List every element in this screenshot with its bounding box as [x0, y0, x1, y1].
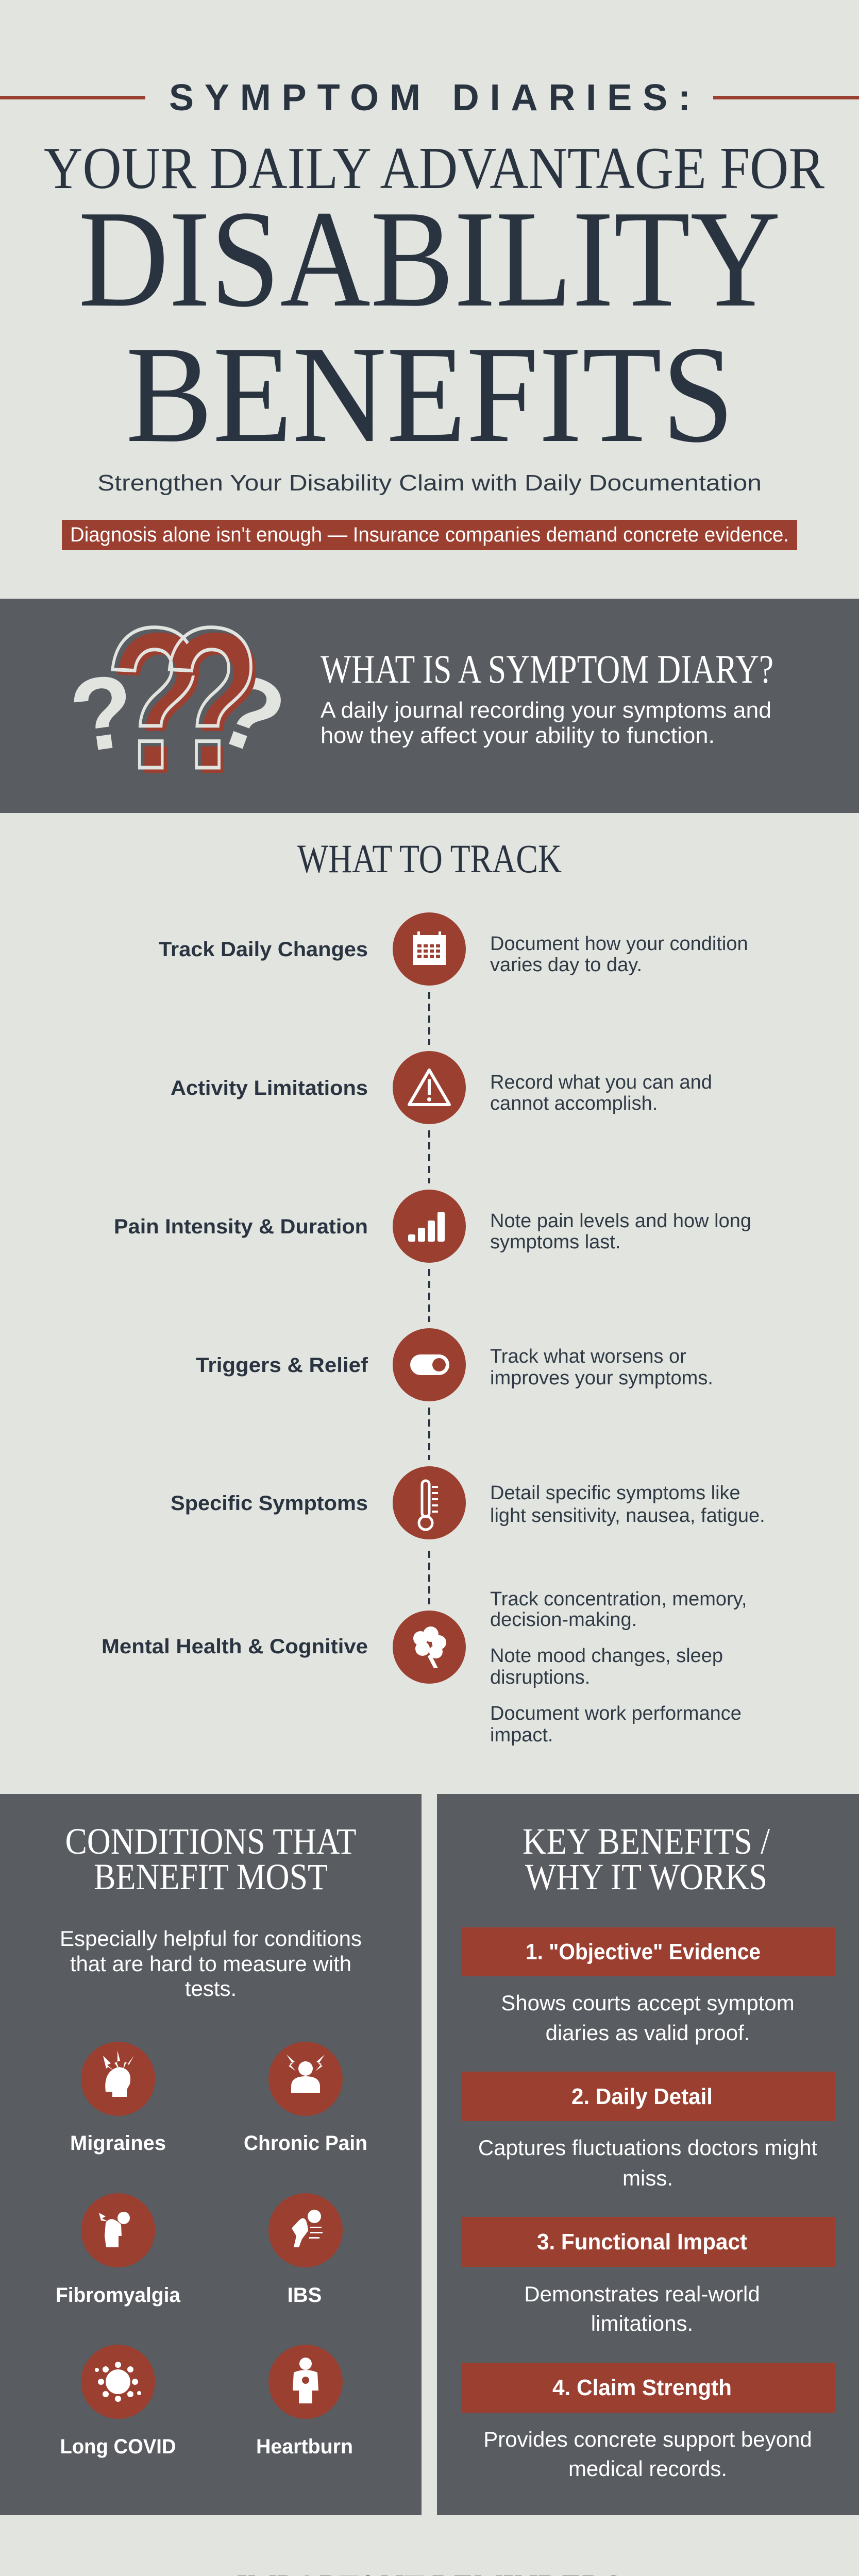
benefit 3: Demonstrates real-world: [524, 2282, 760, 2306]
panel: what is a symptom diary: [0, 586, 859, 816]
item: mental health: Note mood changes, sleep: [490, 1645, 723, 1667]
benefit 2: [462, 2072, 835, 2190]
item: activity limitations: cannot accomplish.: [490, 1093, 658, 1114]
item: track daily changes: varies day to day.: [490, 954, 642, 976]
item: triggers & relief: [196, 1328, 713, 1401]
item: mental health: [102, 1588, 747, 1746]
text: intro: that are hard to measure with: [70, 1952, 351, 1976]
item: specific symptoms: Detail specific symptoms like: [490, 1482, 740, 1504]
panel: conditions that benefit most: [0, 1794, 422, 2515]
text: definition: how they affect your ability to function.: [321, 723, 715, 748]
benefit 4: medical records.: [568, 2456, 727, 2481]
labels: conditions: Fibromyalgia: [56, 2284, 181, 2307]
heading: conditions: CONDITIONS THAT: [65, 1821, 357, 1862]
item: mental health: Mental Health & Cognitive: [102, 1635, 368, 1658]
item: mental health: Track concentration, memory,: [490, 1588, 747, 1610]
heading: key benefits: KEY BENEFITS /: [523, 1821, 770, 1862]
item: activity limitations: Activity Limitations: [171, 1077, 368, 1099]
benefit 1: 1. "Objective" Evidence: [526, 1939, 761, 1964]
item: track daily changes: Document how your condition: [490, 933, 748, 955]
labels: conditions: Migraines: [70, 2132, 166, 2155]
icon: question marks: ?: [200, 649, 299, 778]
text: intro: Especially helpful for conditions: [60, 1926, 362, 1951]
item: triggers & relief: Triggers & Relief: [196, 1354, 368, 1377]
labels: conditions: Heartburn: [256, 2435, 353, 2458]
callout: diagnosis alone: Diagnosis alone isn't enough — Insurance companies demand concrete evidence.: [70, 523, 789, 546]
heading: what to track: WHAT TO TRACK: [297, 836, 562, 881]
benefit 4: 4. Claim Strength: [552, 2375, 732, 2400]
item: specific symptoms: light sensitivity, nausea, fatigue.: [490, 1505, 765, 1527]
labels: conditions: Chronic Pain: [244, 2132, 367, 2155]
icon: question marks: ?: [162, 586, 260, 810]
item: mental health: Document work performance: [490, 1703, 742, 1724]
benefit 2: 2. Daily Detail: [571, 2084, 713, 2109]
icon: question marks: ?: [110, 591, 208, 816]
panel: key benefits: [437, 1794, 859, 2515]
heading: conditions: [65, 1821, 357, 1897]
item: pain intensity: symptoms last.: [490, 1231, 620, 1253]
labels: conditions: Long COVID: [60, 2435, 176, 2458]
item: specific symptoms: [171, 1466, 765, 1539]
heading: key benefits: WHY IT WORKS: [525, 1856, 767, 1897]
timeline: what to track: [102, 912, 765, 1746]
benefit 2: miss.: [622, 2166, 673, 2190]
labels: conditions: [56, 2132, 367, 2458]
icon: question marks: [63, 586, 299, 816]
item: pain intensity: Pain Intensity & Duration: [114, 1215, 368, 1238]
text: intro: [60, 1926, 362, 2001]
icon grid: conditions: [81, 2042, 343, 2419]
text: definition: [321, 698, 771, 748]
benefit 1: diaries as valid proof.: [546, 2021, 750, 2045]
text: definition: A daily journal recording your symptoms and: [321, 698, 771, 723]
heading: key benefits: [523, 1821, 770, 1897]
benefit 2: Captures fluctuations doctors might: [478, 2136, 817, 2160]
benefit 4: [462, 2363, 835, 2481]
title line 2: DISABILITY: [78, 182, 781, 336]
item: track daily changes: [159, 912, 748, 986]
item: pain intensity: [114, 1190, 751, 1263]
icon: question marks: ?: [63, 652, 142, 775]
labels: conditions: IBS: [288, 2284, 322, 2307]
subtitle: Strengthen Your Disability Claim with Daily Documentation: [97, 470, 762, 496]
benefit 3: limitations.: [591, 2311, 693, 2335]
item: mental health: impact.: [490, 1724, 553, 1746]
benefit 3: [462, 2217, 835, 2335]
heading: conditions: BENEFIT MOST: [94, 1856, 328, 1897]
header: [0, 77, 859, 550]
item: triggers & relief: improves your symptoms.: [490, 1367, 713, 1389]
item: activity limitations: Record what you can and: [490, 1072, 712, 1093]
benefit 3: 3. Functional Impact: [537, 2229, 747, 2255]
item: track daily changes: Track Daily Changes: [159, 938, 368, 961]
icon: question marks: ?: [167, 591, 265, 816]
benefit 1: Shows courts accept symptom: [501, 1991, 795, 2015]
benefit 4: Provides concrete support beyond: [483, 2427, 812, 2451]
item: mental health: decision-making.: [490, 1609, 637, 1631]
icon: question marks: ?: [105, 586, 204, 810]
item: specific symptoms: Specific Symptoms: [171, 1492, 368, 1515]
item: mental health: disruptions.: [490, 1667, 590, 1688]
benefit 1: [462, 1927, 835, 2045]
item: triggers & relief: Track what worsens or: [490, 1346, 686, 1367]
text: intro: tests.: [185, 1976, 237, 2001]
title line 3: BENEFITS: [126, 317, 734, 471]
item: activity limitations: [171, 1051, 712, 1124]
kicker: symptom diaries: SYMPTOM DIARIES:: [169, 77, 690, 118]
item: pain intensity: Note pain levels and how long: [490, 1210, 751, 1232]
